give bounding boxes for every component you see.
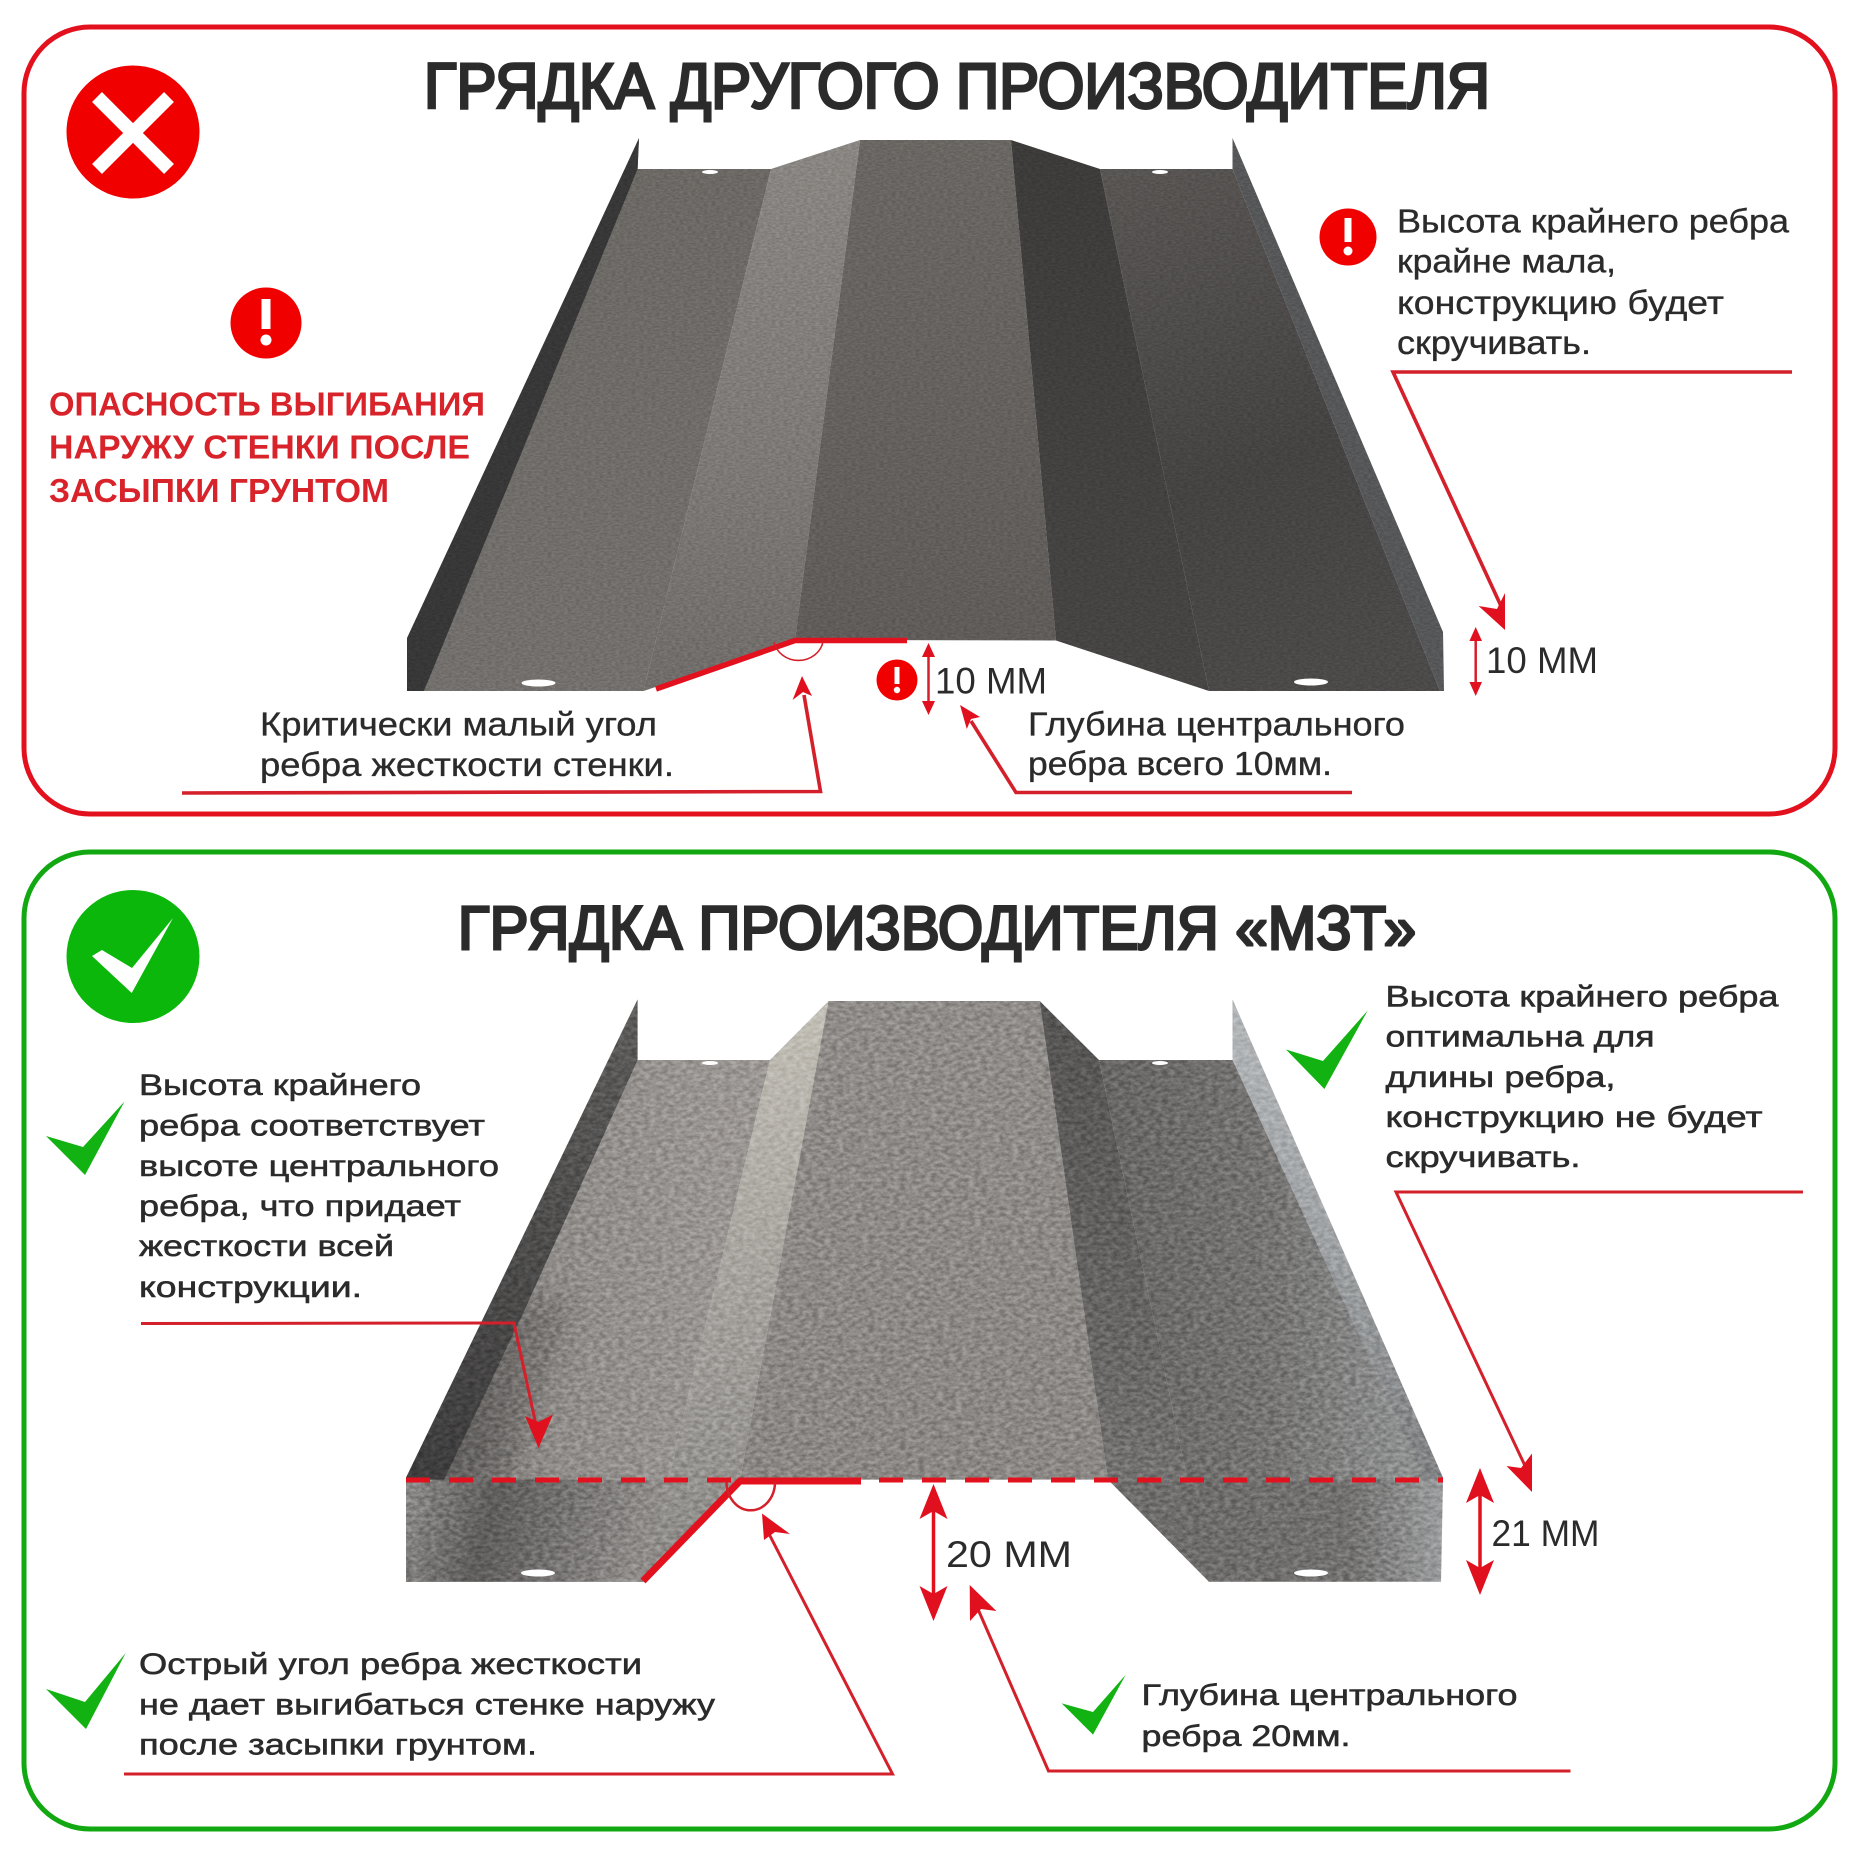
callout: center rib depth 20 mm — [970, 1585, 1570, 1771]
dimension: outer rib 21 mm — [1466, 1468, 1600, 1595]
warning: risk of bending: ЗАСЫПКИ ГРУНТОМ — [49, 472, 389, 509]
icon: check — [1062, 1675, 1126, 1735]
callout: outer rib optimal: Высота крайнего ребра — [1386, 980, 1779, 1014]
panel: other manufacturer — [24, 27, 1835, 814]
panel: MZT manufacturer — [24, 852, 1835, 1829]
callout: center rib depth 20 mm: ребра 20мм. — [1142, 1720, 1350, 1753]
icon: check — [46, 1102, 124, 1175]
callout: center rib depth 10 mm: ребра всего 10мм. — [1028, 745, 1332, 782]
icon: check — [46, 1653, 126, 1729]
icon: check — [1286, 1010, 1368, 1089]
dimension: outer rib 10 mm — [1469, 627, 1598, 696]
dimension: center rib 20 mm — [920, 1484, 1072, 1621]
metal bed: MZT — [406, 999, 1443, 1582]
warning: risk of bending: НАРУЖУ СТЕНКИ ПОСЛЕ — [49, 428, 470, 466]
callout: outer rib height: скручивать. — [1397, 324, 1591, 361]
callout: center rib depth 20 mm: Глубина центрального — [1142, 1679, 1518, 1712]
callout: center rib depth 10 mm: Глубина центрального — [1028, 706, 1405, 742]
red outline: rib profile — [406, 1480, 1443, 1581]
callout: sharp angle: Острый угол ребра жесткости — [139, 1648, 642, 1681]
title: other manufacturer: ГРЯДКА ДРУГОГО ПРОИЗВОДИТЕЛЯ — [424, 51, 1490, 122]
callout: center rib depth 10 mm — [960, 705, 1405, 792]
dimension: outer rib 10 mm: 10 ММ — [1486, 640, 1598, 681]
callout: outer rib matches center: ребра соответствует — [139, 1110, 485, 1142]
dimension: outer rib 21 mm: 21 ММ — [1492, 1513, 1600, 1554]
warning: risk of bending — [49, 288, 485, 509]
callout: outer rib height: крайне мала, — [1397, 242, 1616, 280]
callout: small angle: ребра жесткости стенки. — [260, 746, 674, 783]
callout: outer rib matches center: высоте центрального — [139, 1150, 499, 1183]
callout: sharp angle — [46, 1514, 892, 1774]
warning: risk of bending: ОПАСНОСТЬ ВЫГИБАНИЯ — [49, 386, 485, 422]
red outline: wall angle — [656, 640, 907, 689]
callout: outer rib optimal: скручивать. — [1386, 1141, 1580, 1174]
dimension: center rib 10 mm — [876, 643, 1047, 715]
callout: outer rib optimal — [1286, 980, 1803, 1492]
icon: exclamation — [876, 660, 918, 700]
callout: small angle — [182, 676, 820, 793]
callout: outer rib matches center: ребра, что придает — [139, 1190, 461, 1223]
dimension: center rib 10 mm: 10 ММ — [935, 660, 1047, 702]
callout: outer rib matches center: жесткости всей — [139, 1230, 394, 1263]
icon: exclamation — [230, 288, 302, 358]
callout: outer rib matches center — [46, 1069, 553, 1448]
callout: small angle: Критически малый угол — [260, 706, 657, 742]
callout: sharp angle: после засыпки грунтом. — [139, 1728, 537, 1762]
callout: outer rib optimal: конструкцию не будет — [1386, 1101, 1763, 1134]
metal bed: other manufacturer — [407, 138, 1444, 691]
callout: outer rib optimal: длины ребра, — [1386, 1061, 1616, 1094]
callout: sharp angle: не дает выгибаться стенке наружу — [139, 1688, 715, 1722]
callout: outer rib matches center: конструкции. — [139, 1271, 362, 1304]
callout: outer rib height — [1320, 202, 1792, 630]
callout: outer rib height: Высота крайнего ребра — [1397, 202, 1790, 240]
icon: green check circle — [66, 890, 200, 1023]
callout: outer rib optimal: оптимальна для — [1386, 1020, 1654, 1054]
callout: outer rib matches center: Высота крайнего — [139, 1069, 421, 1102]
icon: exclamation — [1320, 208, 1376, 266]
dimension: center rib 20 mm: 20 ММ — [946, 1534, 1072, 1575]
title: MZT manufacturer: ГРЯДКА ПРОИЗВОДИТЕЛЯ «МЗТ» — [458, 893, 1416, 962]
callout: outer rib height: конструкцию будет — [1397, 284, 1724, 321]
icon: red cross circle — [66, 66, 200, 198]
